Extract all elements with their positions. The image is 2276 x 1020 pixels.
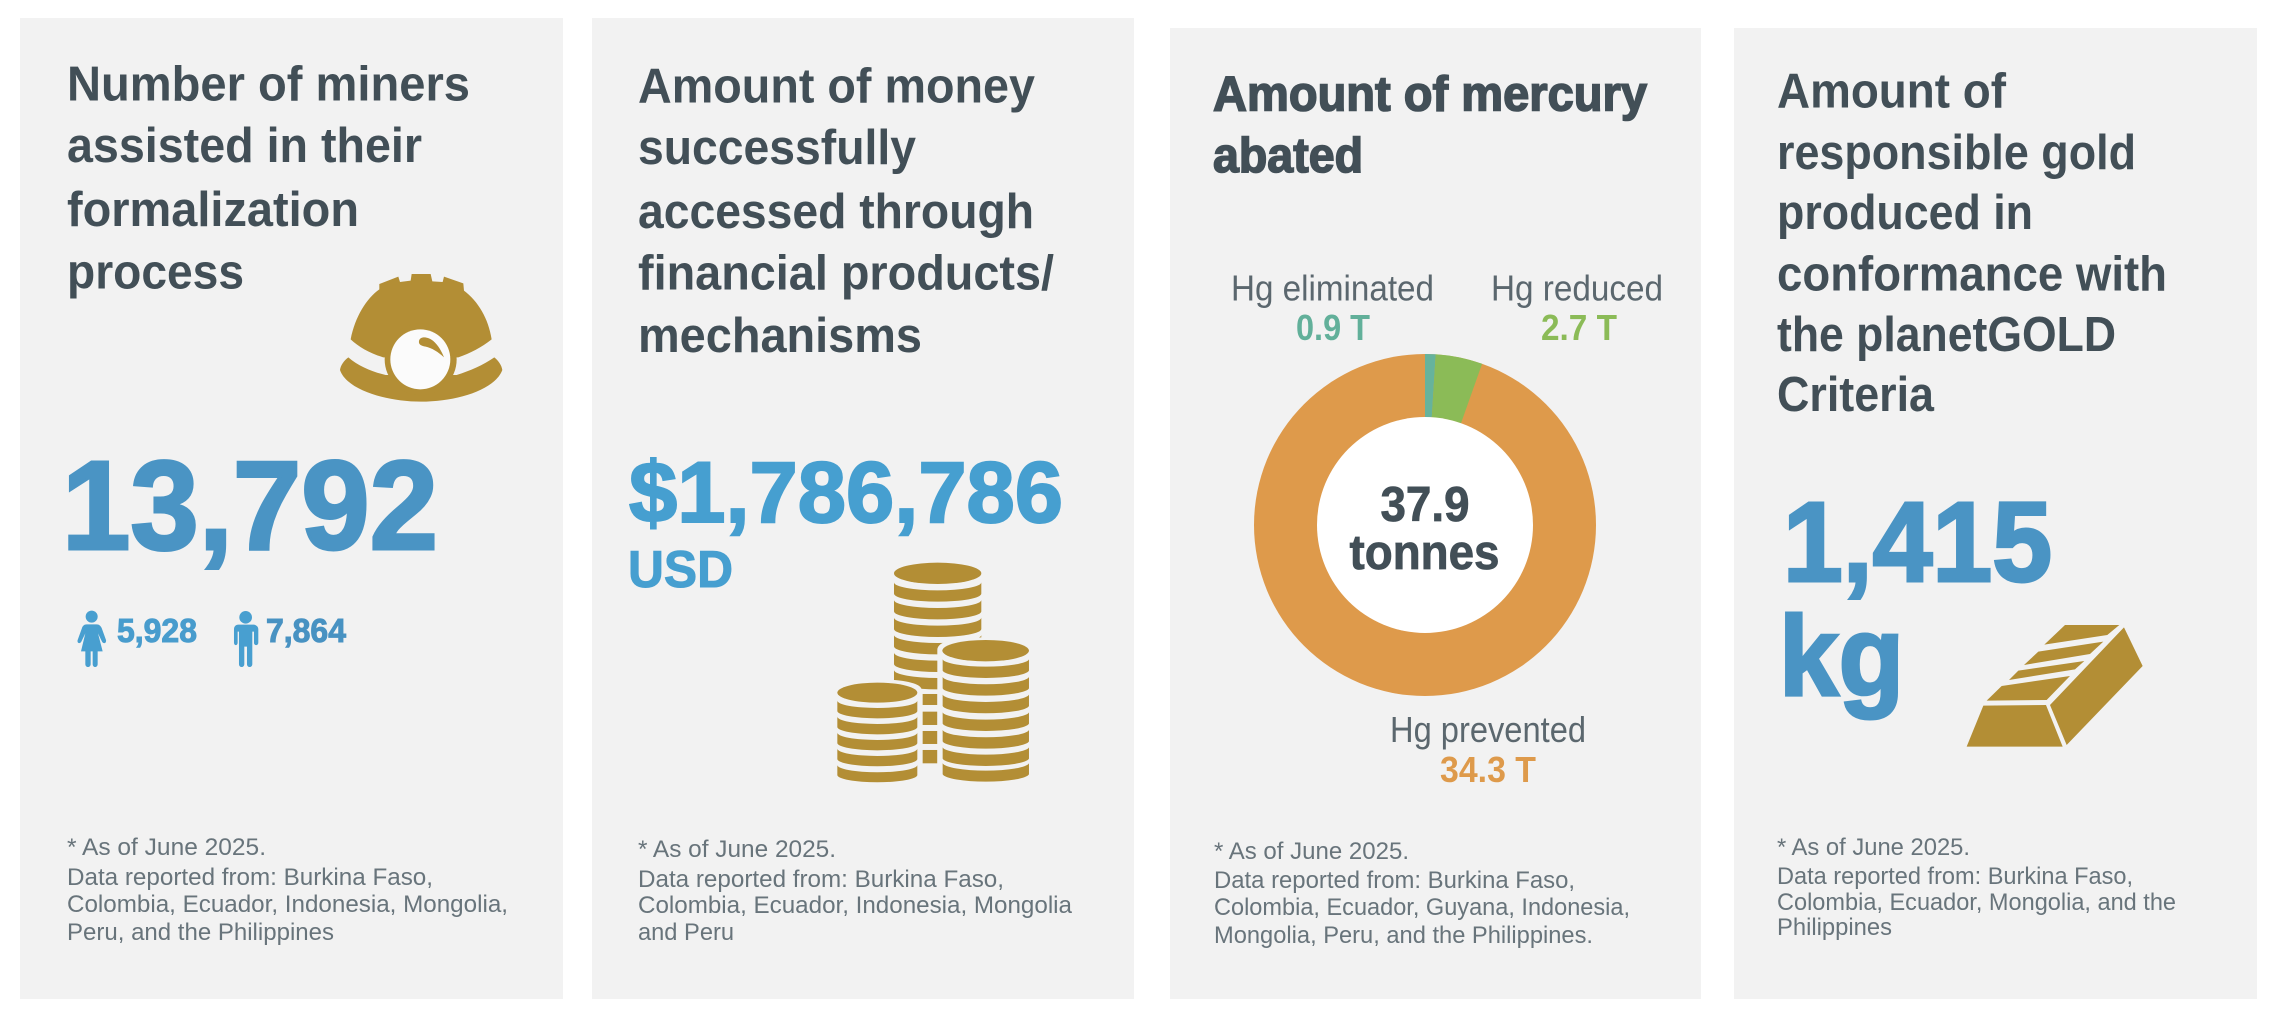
footnote: miners	[67, 834, 508, 946]
footnote: mercury	[1214, 838, 1630, 949]
label: Hg prevented: Hg prevented	[1390, 709, 1586, 750]
heading: amount of responsible gold: Amount of	[1777, 64, 2007, 118]
donut centre total: 37.9	[1380, 478, 1470, 532]
heading: number of miners: Number of miners	[67, 58, 470, 112]
icon: miner helmet	[340, 274, 502, 402]
big number: dollars: $1,786,786	[629, 445, 1063, 541]
footnote: gold: Data reported from: Burkina Faso,	[1777, 863, 2133, 890]
footnote: miners: * As of June 2025.	[67, 834, 266, 861]
big number: kilograms: 1,415	[1783, 479, 2052, 605]
footnote: money	[638, 836, 1073, 946]
heading: number of miners: formalization	[67, 183, 359, 237]
women count: 5,928	[117, 612, 197, 649]
label: Hg reduced: Hg reduced	[1491, 268, 1663, 308]
donut centre total	[1350, 478, 1500, 580]
icon: gold bar	[1967, 625, 2143, 747]
panel: money accessed	[592, 18, 1134, 999]
donut chart: mercury by category	[1254, 354, 1596, 696]
heading: amount of mercury: abated	[1213, 129, 1363, 183]
heading: amount of responsible gold	[1777, 64, 2167, 422]
label: Hg reduced: 2.7 T	[1541, 307, 1617, 348]
footnote: mercury: Colombia, Ecuador, Guyana, Indonesia,	[1214, 894, 1630, 921]
heading: amount of responsible gold: the planetGOLD	[1777, 308, 2116, 362]
panel: responsible gold	[1734, 28, 2257, 999]
heading: number of miners	[67, 58, 470, 300]
heading: amount of money: mechanisms	[638, 309, 922, 363]
footnote: miners: Colombia, Ecuador, Indonesia, Mongolia,	[67, 891, 508, 918]
men count: 7,864	[266, 612, 347, 649]
footnote: mercury: * As of June 2025.	[1214, 838, 1409, 865]
heading: amount of money: financial products/	[638, 246, 1054, 300]
heading: amount of mercury	[1213, 68, 1647, 183]
footnote: miners: Data reported from: Burkina Faso,	[67, 864, 433, 891]
big number: total miners: 13,792	[62, 435, 438, 576]
label: Hg eliminated: 0.9 T	[1296, 307, 1370, 348]
label: Hg eliminated	[1231, 268, 1434, 348]
footnote: gold	[1777, 834, 2176, 941]
panel: mercury abated	[1170, 28, 1701, 999]
footnote: mercury: Data reported from: Burkina Faso,	[1214, 867, 1575, 894]
currency label: USD	[628, 541, 733, 599]
heading: amount of mercury: Amount of mercury	[1213, 68, 1647, 122]
heading: amount of responsible gold: produced in	[1777, 186, 2033, 240]
footnote: gold: Colombia, Ecuador, Mongolia, and the	[1777, 889, 2176, 916]
footnote: money: Colombia, Ecuador, Indonesia, Mongolia	[638, 892, 1073, 919]
label: Hg reduced	[1491, 268, 1663, 348]
footnote: money: Data reported from: Burkina Faso,	[638, 866, 1004, 893]
footnote: gold: * As of June 2025.	[1777, 834, 1970, 861]
footnote: miners: Peru, and the Philippines	[67, 919, 334, 946]
icon: coin stacks	[833, 563, 1033, 783]
footnote: money: * As of June 2025.	[638, 836, 836, 863]
big number: kilograms: kg	[1779, 593, 1904, 719]
heading: amount of responsible gold: responsible gold	[1777, 126, 2136, 180]
big number: kilograms	[1779, 479, 2052, 719]
label: Hg prevented: 34.3 T	[1440, 749, 1536, 790]
footnote: gold: Philippines	[1777, 914, 1892, 941]
label: Hg eliminated: Hg eliminated	[1231, 268, 1434, 308]
heading: amount of money: Amount of money	[638, 60, 1035, 114]
label: Hg prevented	[1390, 709, 1586, 790]
heading: number of miners: process	[67, 246, 244, 300]
heading: amount of responsible gold: conformance with	[1777, 248, 2167, 302]
icon: man	[234, 611, 258, 667]
heading: amount of responsible gold: Criteria	[1777, 368, 1935, 422]
footnote: money: and Peru	[638, 919, 734, 946]
donut centre total: tonnes	[1350, 526, 1500, 580]
icon: woman	[77, 611, 106, 667]
heading: amount of money: successfully	[638, 121, 916, 175]
footnote: mercury: Mongolia, Peru, and the Philippines.	[1214, 922, 1593, 949]
heading: number of miners: assisted in their	[67, 119, 422, 173]
panel: miners assisted	[20, 18, 563, 999]
heading: amount of money: accessed through	[638, 185, 1034, 239]
heading: amount of money	[638, 60, 1054, 363]
